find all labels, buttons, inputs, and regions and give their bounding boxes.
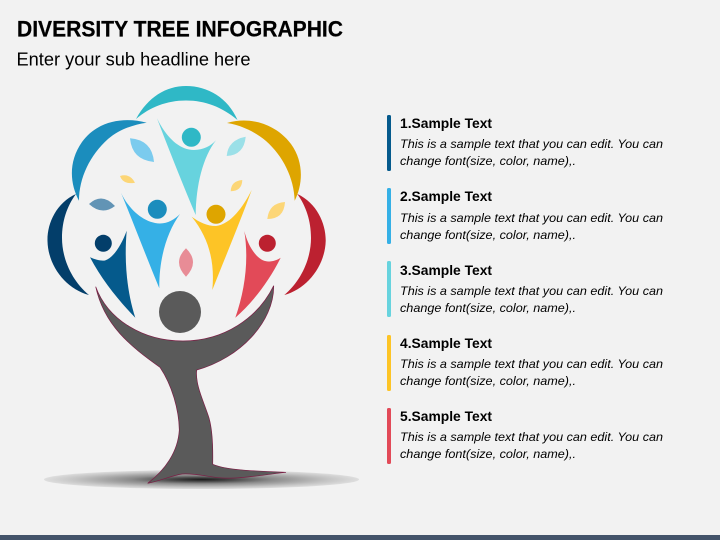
figure: blue person xyxy=(121,193,180,288)
tree illustration xyxy=(44,86,359,489)
leaf: large yellow right xyxy=(267,202,285,219)
canopy arc: teal xyxy=(136,86,238,120)
canopy arc: blue xyxy=(72,120,147,201)
figure: yellow person xyxy=(192,190,252,290)
canopy arc: red xyxy=(284,194,326,295)
heading 4: 4.Sample Text xyxy=(400,335,492,351)
list item 4 xyxy=(387,335,663,391)
accent bar 1 xyxy=(387,115,391,171)
figure: navy person xyxy=(90,231,135,318)
heading 5: 5.Sample Text xyxy=(400,408,492,424)
leaf: light teal xyxy=(227,137,246,156)
body 4: change font(size, color, name),. xyxy=(400,374,576,388)
body 5: change font(size, color, name),. xyxy=(400,447,576,461)
list item 3 xyxy=(387,261,663,317)
body 3: This is a sample text that you can edit. You can xyxy=(400,284,663,298)
leaf: small yellow right xyxy=(231,180,242,191)
body 1: This is a sample text that you can edit. You can xyxy=(400,137,663,151)
heading 1: 1.Sample Text xyxy=(400,115,492,131)
accent bar 5 xyxy=(387,408,391,464)
footer bar xyxy=(0,535,720,540)
leaf: small yellow left xyxy=(120,175,135,183)
leaf: steel blue xyxy=(89,198,115,211)
accent bar 4 xyxy=(387,335,391,391)
body 2: This is a sample text that you can edit. You can xyxy=(400,211,663,225)
canopy arc: navy xyxy=(47,194,89,295)
accent bar 2 xyxy=(387,188,391,244)
leaf: pink xyxy=(179,248,193,277)
list item 2 xyxy=(387,188,663,244)
figure: teal person xyxy=(157,118,216,215)
accent bar 3 xyxy=(387,261,391,317)
canopy arc: gold xyxy=(227,121,301,201)
body 1: change font(size, color, name),. xyxy=(400,154,576,168)
body 4: This is a sample text that you can edit. You can xyxy=(400,357,663,371)
heading 2: 2.Sample Text xyxy=(400,188,492,204)
subtitle: Enter your sub headline here xyxy=(16,50,250,70)
list item 1 xyxy=(387,115,663,171)
title: DIVERSITY TREE INFOGRAPHIC xyxy=(17,16,343,42)
leaf: light blue xyxy=(130,138,154,162)
head xyxy=(159,291,201,333)
list item 5 xyxy=(387,408,663,464)
figure: red person xyxy=(235,231,281,318)
trunk and arms xyxy=(96,286,286,483)
tree trunk person xyxy=(96,286,286,483)
body 5: This is a sample text that you can edit. You can xyxy=(400,430,663,444)
body 2: change font(size, color, name),. xyxy=(400,228,576,242)
ground shadow xyxy=(44,470,359,489)
heading 3: 3.Sample Text xyxy=(400,262,492,278)
body 3: change font(size, color, name),. xyxy=(400,301,576,315)
